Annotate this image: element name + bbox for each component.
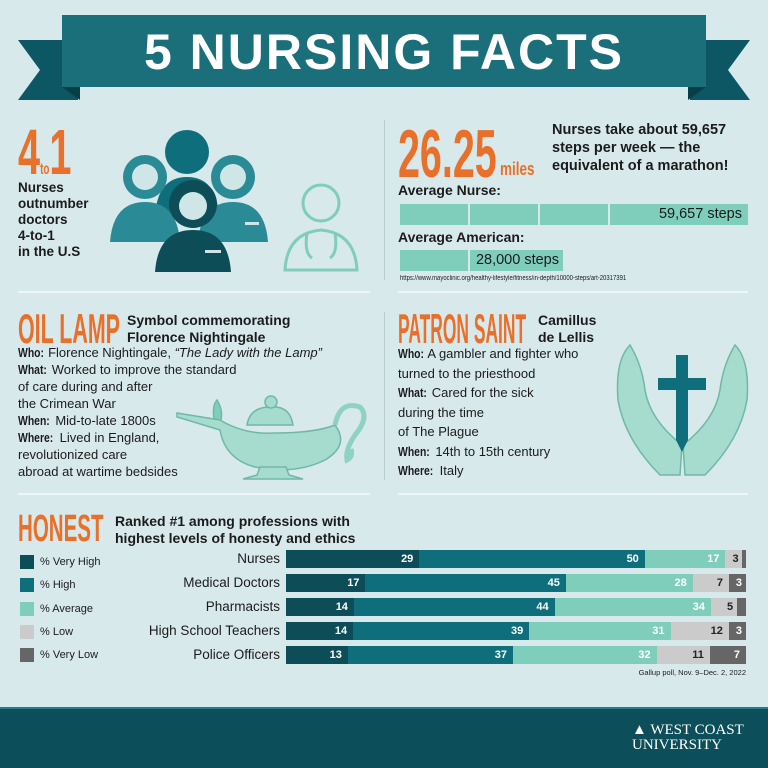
panel: patron saint: de Lellis — [538, 329, 594, 345]
4 to 1 stat: outnumber — [18, 196, 88, 211]
bar chart: honesty ratings: 7 — [717, 577, 723, 589]
panel: oil lamp: Worked to improve the standard — [52, 362, 236, 377]
legend: % Very Low — [40, 649, 98, 661]
marathon stat: miles — [500, 159, 535, 179]
bar: average nurse: 59,657 steps — [659, 206, 742, 222]
bar chart: honesty ratings: 32 — [638, 649, 651, 661]
bar: average nurse: Average Nurse: — [398, 182, 501, 198]
panel: oil lamp: Symbol commemorating — [127, 312, 290, 328]
panel: oil lamp: Where: — [18, 430, 53, 445]
panel: oil lamp: revolutionized care — [18, 447, 127, 462]
bar: average american: 28,000 steps — [476, 252, 559, 268]
logo: west coast university — [632, 722, 744, 753]
bar chart: honesty ratings: High School Teachers — [149, 623, 280, 638]
panel: patron saint: Italy — [440, 463, 464, 478]
icon: hands with cross — [616, 344, 748, 476]
bar chart: honesty ratings: 5 — [727, 601, 733, 613]
bar chart: honesty ratings: 17 — [707, 553, 719, 565]
panel: patron saint: of The Plague — [398, 424, 479, 439]
panel: patron saint: When: — [398, 444, 430, 458]
logo: west coast university: ▲ WEST COAST — [632, 722, 744, 738]
legend: % High — [40, 579, 75, 591]
panel: patron saint: Who: — [398, 346, 424, 361]
4 to 1 stat — [18, 116, 88, 259]
panel: oil lamp: Mid-to-late 1800s — [55, 413, 156, 428]
bar: average american: https://www.mayoclinic.org/healthy-lifestyle/fitness/in-depth/10000-steps/art-20317391 — [400, 275, 626, 282]
panel: patron saint: PATRON SAINT — [398, 305, 526, 352]
panel: patron saint: during the time — [398, 404, 484, 420]
panel: oil lamp: OIL LAMP — [18, 305, 120, 352]
panel: oil lamp: Florence Nightingale, “The Lady with the Lamp” — [48, 345, 322, 360]
legend — [20, 555, 101, 662]
bar chart: honesty ratings — [149, 550, 746, 677]
panel: oil lamp: When: — [18, 413, 50, 428]
bar chart: honesty ratings: Nurses — [237, 551, 280, 566]
vertical divider — [384, 120, 385, 280]
bar chart: honesty ratings: 12 — [711, 625, 723, 637]
bar chart: honesty ratings: 50 — [627, 553, 639, 565]
bar chart: honesty ratings: 37 — [495, 649, 507, 661]
4 to 1 stat: doctors — [18, 212, 68, 227]
bar chart: honesty ratings: Gallup poll, Nov. 9–Dec. 2, 2022 — [639, 668, 746, 677]
bar chart: honesty ratings: 28 — [675, 577, 687, 589]
panel: oil lamp: Lived in England, — [60, 430, 159, 445]
4 to 1 stat: 4-to-1 — [18, 228, 55, 243]
panel: oil lamp: the Crimean War — [18, 396, 116, 411]
4 to 1 stat: in the U.S — [18, 244, 80, 259]
4 to 1 stat: Nurses — [18, 180, 64, 195]
bar chart: honesty ratings: 3 — [736, 577, 742, 589]
bar chart: honesty ratings: 39 — [511, 625, 523, 637]
bar chart: honesty ratings: Police Officers — [193, 647, 280, 662]
title text: 5 NURSING FACTS — [144, 24, 624, 80]
panel: oil lamp: abroad at wartime bedsides — [18, 464, 178, 479]
panel: patron saint: Camillus — [538, 312, 596, 328]
bar: average nurse — [398, 182, 748, 225]
panel: oil lamp: Who: — [18, 345, 44, 360]
panel: patron saint: Where: — [398, 463, 433, 478]
marathon stat: Nurses take about 59,657 steps per week — the equivalent of a marathon! — [552, 122, 728, 174]
bar: average american — [398, 229, 626, 282]
bar chart: honesty ratings: 14 — [336, 601, 348, 613]
legend: % Low — [40, 626, 73, 638]
vertical divider — [384, 312, 385, 480]
heading: honest: highest levels of honesty and ethics — [115, 530, 355, 546]
panel: patron saint: A gambler and fighter who — [427, 346, 578, 361]
bar chart: honesty ratings: 34 — [693, 601, 705, 613]
heading: honest: Ranked #1 among professions with — [115, 513, 350, 529]
legend: % Average — [40, 603, 93, 615]
bar chart: honesty ratings: 3 — [736, 625, 742, 637]
panel: patron saint — [398, 305, 596, 478]
bar: average american: Average American: — [398, 229, 525, 245]
title banner — [18, 15, 750, 100]
bar chart: honesty ratings: 17 — [347, 577, 359, 589]
heading: honest: HONEST — [18, 508, 104, 550]
panel: patron saint: turned to the priesthood — [398, 366, 535, 380]
bar chart: honesty ratings: 14 — [335, 625, 347, 637]
bar chart: honesty ratings: 45 — [548, 577, 560, 589]
footer — [0, 707, 768, 768]
bar chart: honesty ratings: 7 — [734, 649, 740, 661]
bar chart: honesty ratings: Pharmacists — [206, 599, 280, 614]
panel: oil lamp: What: — [18, 362, 47, 377]
bar chart: honesty ratings: 31 — [652, 625, 665, 637]
bar chart: honesty ratings: 29 — [401, 553, 413, 565]
marathon stat: 26.25 — [398, 116, 497, 192]
icon: nurses group — [110, 130, 268, 272]
panel: patron saint: What: — [398, 385, 427, 400]
panel: patron saint: Cared for the sick — [432, 385, 534, 400]
marathon stat — [398, 116, 728, 192]
legend: % Very High — [40, 556, 101, 568]
icon: doctor — [283, 184, 359, 272]
panel: patron saint: 14th to 15th century — [435, 444, 550, 458]
bar chart: honesty ratings: 11 — [692, 649, 704, 661]
panel: oil lamp: Florence Nightingale — [127, 329, 265, 345]
bar chart: honesty ratings: 13 — [330, 649, 342, 661]
bar chart: honesty ratings: Medical Doctors — [183, 575, 280, 590]
4 to 1 stat: 4to1 — [18, 116, 72, 188]
panel: oil lamp — [18, 305, 322, 479]
bar chart: honesty ratings: 44 — [536, 601, 549, 613]
bar chart: honesty ratings: 3 — [732, 553, 739, 565]
logo: west coast university: UNIVERSITY — [632, 737, 722, 753]
icon: oil lamp — [176, 395, 366, 480]
heading: honest — [18, 508, 355, 550]
panel: oil lamp: of care during and after — [18, 379, 152, 394]
